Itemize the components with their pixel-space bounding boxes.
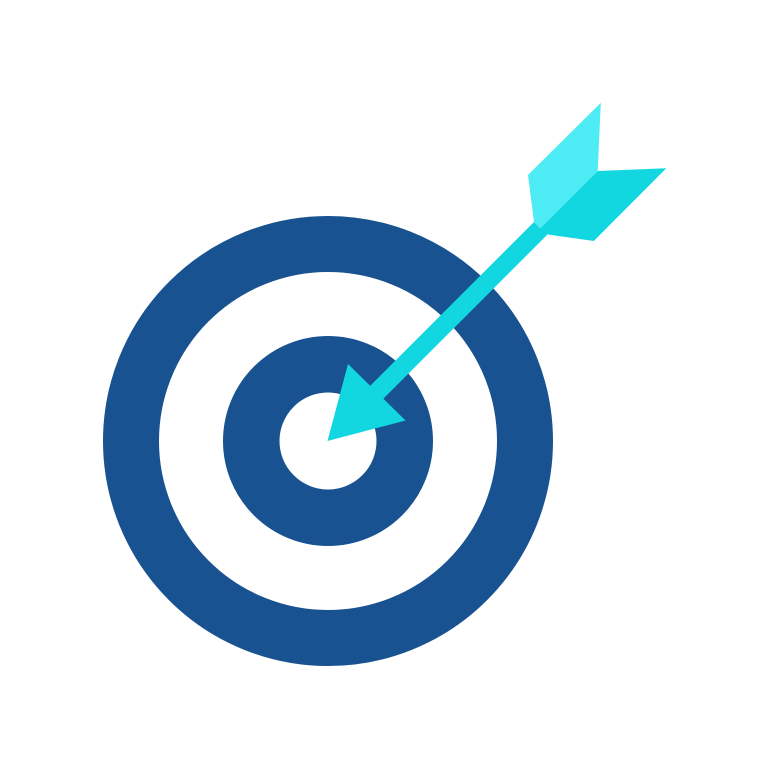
fletching: darker lower half	[540, 168, 666, 241]
arrow shaft	[362, 222, 547, 406]
arrow head	[328, 364, 406, 441]
target: concentric rings	[131, 244, 525, 638]
arrow	[328, 103, 666, 441]
fletching: lighter upper half	[528, 103, 601, 228]
